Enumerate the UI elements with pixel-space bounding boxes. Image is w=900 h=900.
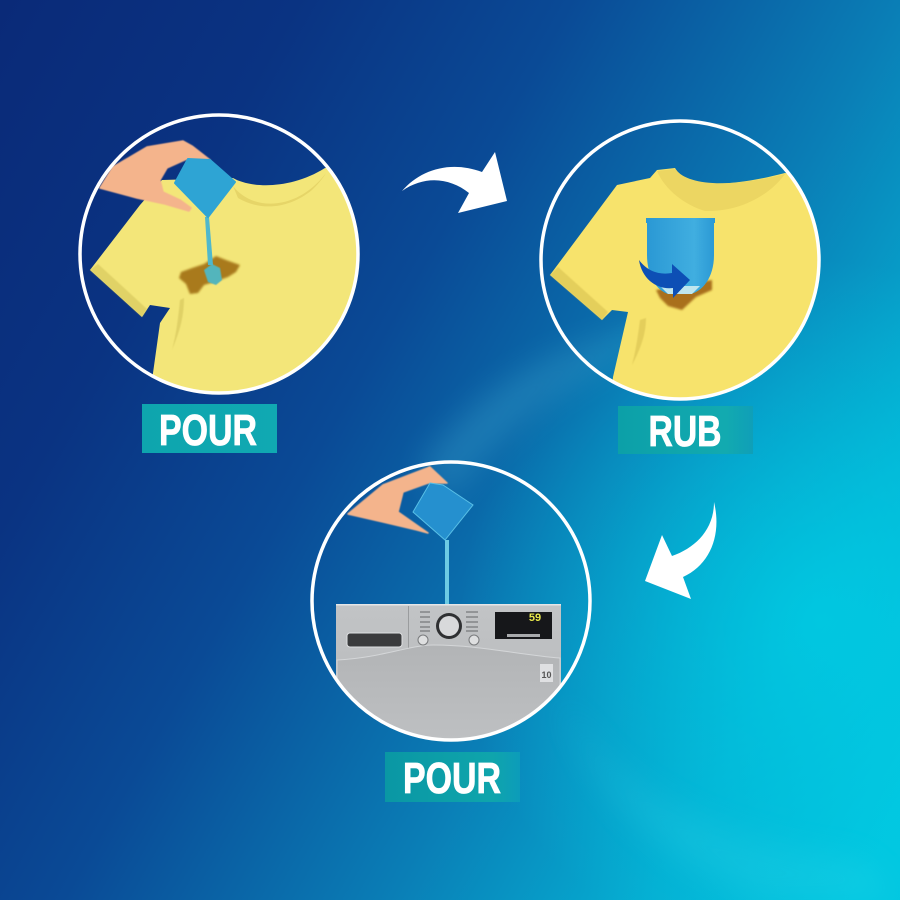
label: POUR (step 1): POUR — [159, 406, 257, 455]
label: RUB: RUB — [648, 407, 722, 456]
collar — [233, 173, 326, 206]
measuring cup — [413, 483, 473, 540]
ring — [541, 121, 819, 399]
sleeve hem and folds — [90, 264, 184, 350]
buttons — [418, 635, 428, 645]
stain — [179, 256, 240, 294]
ring — [312, 462, 590, 740]
shirt — [550, 168, 830, 410]
rub cup — [646, 218, 715, 294]
door curve — [337, 645, 560, 749]
stain — [656, 280, 712, 310]
liquid stream — [445, 540, 449, 604]
dial — [436, 613, 462, 639]
LG badge — [540, 664, 553, 682]
display panel — [495, 612, 552, 639]
drawer handle — [347, 633, 402, 647]
splash — [204, 264, 222, 285]
hand — [348, 467, 447, 533]
panel: step 2 rub on shirt — [541, 121, 830, 410]
hand — [100, 141, 210, 211]
panel: step 1 pour on shirt — [80, 115, 370, 400]
drawer divider — [408, 606, 409, 652]
arrow: step 1 to step 2 — [402, 152, 507, 213]
ring — [80, 115, 358, 393]
rub arrow — [639, 260, 690, 298]
arrow: step 2 to step 3 — [645, 502, 716, 599]
shirt — [90, 168, 370, 400]
washing machine — [336, 604, 561, 749]
washing machine: 59 — [529, 612, 541, 624]
program list lines — [420, 612, 478, 631]
label: POUR (step 3): POUR — [403, 754, 501, 803]
measuring cup — [175, 159, 235, 217]
cup foam — [660, 286, 700, 294]
sleeve hem and folds — [550, 267, 646, 365]
washing machine: 10 — [541, 670, 552, 680]
label: RUB — [618, 406, 753, 456]
liquid stream — [205, 217, 213, 265]
panel: step 3 pour in washing machine — [312, 462, 590, 749]
collar — [657, 169, 785, 211]
